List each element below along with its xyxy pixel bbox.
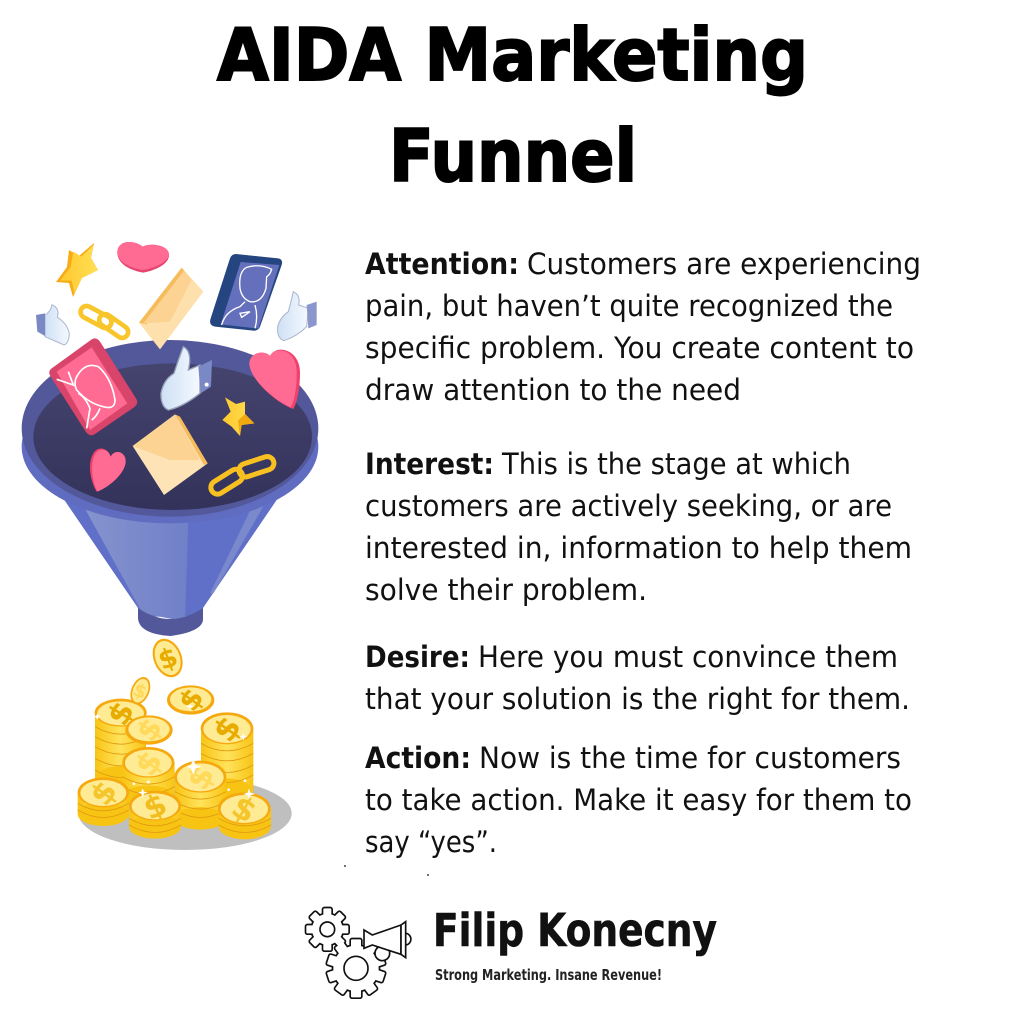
coin stack front middle (129, 787, 181, 839)
text block: interest: interested in, information to help them (365, 531, 912, 565)
funnel illustration (22, 242, 318, 636)
text block: desire: that your solution is the right for them. (365, 682, 910, 716)
text block: action: Action: (365, 741, 471, 775)
text block: attention (365, 247, 921, 407)
text block: action: to take action. Make it easy for them to (365, 783, 912, 817)
text block: attention: pain, but haven’t quite recognized the (365, 289, 893, 323)
icon: thumb center (161, 347, 212, 410)
logo tagline: Strong Marketing. Insane Revenue! (435, 966, 662, 984)
coin stack front right (218, 789, 271, 839)
icon: phone with man (210, 254, 282, 331)
coin stack center: $ (128, 744, 170, 783)
coin stack back right: $ (205, 709, 249, 749)
title: Funnel (389, 114, 637, 198)
falling coin small: $ (130, 680, 150, 704)
funnel cone (39, 463, 302, 622)
coin stack back left: $ (101, 696, 142, 732)
funnel rim (22, 340, 318, 517)
funnel nozzle (138, 608, 203, 636)
coin stack right center (174, 759, 226, 830)
text block: interest: customers are actively seeking, or are (365, 489, 892, 523)
icon: star lower (222, 397, 254, 436)
coin stack center (122, 744, 175, 809)
coin stack front right: $ (225, 789, 262, 831)
falling coin flat: $ (171, 682, 211, 717)
icon: heart top (117, 242, 169, 273)
logo name: Filip Konecny (433, 904, 717, 957)
text block: interest: This is the stage at which (501, 447, 851, 481)
logo icon: gears and megaphone (306, 908, 411, 997)
coin stack right center: $ (180, 759, 222, 796)
falling coin small (127, 674, 154, 707)
falling coin large (147, 634, 188, 682)
icon: heart right (249, 350, 300, 409)
text block: attention: Attention: (365, 247, 519, 281)
text block: desire: Here you must convince them (478, 640, 898, 674)
text block: desire (365, 640, 910, 716)
coin stack front middle: $ (138, 787, 173, 828)
text block: action: Now is the time for customers (479, 741, 901, 775)
title: AIDA Marketing (217, 13, 808, 97)
text block: action: say “yes”. (365, 825, 497, 859)
icon: thumb right (278, 292, 317, 341)
text block: interest: Interest: (365, 447, 494, 481)
text block: attention: draw attention to the need (365, 373, 741, 407)
coin sparkles (94, 703, 255, 799)
coin stack back left (95, 696, 147, 793)
flat coin on back stack: $ (129, 711, 169, 748)
text block: action (365, 741, 912, 859)
text block: attention: Customers are experiencing (527, 247, 921, 281)
text block: desire: Desire: (365, 640, 470, 674)
coins illustration (78, 634, 292, 850)
icon: envelope lower (133, 414, 208, 495)
icon: pink phone (49, 338, 137, 435)
falling coin large: $ (154, 641, 182, 677)
icon: envelope top (139, 268, 203, 349)
icon: chain top (78, 304, 130, 340)
logo (306, 904, 717, 997)
funnel rim lip (22, 370, 318, 523)
icon: heart lower (90, 449, 126, 492)
icon: star top left (56, 243, 98, 297)
text block: interest (365, 447, 912, 607)
icon: chain lower (208, 455, 276, 497)
funnel interior (33, 363, 312, 510)
coin stack back right (201, 709, 253, 805)
coin stack front left (78, 775, 129, 826)
coin stack front left: $ (84, 775, 125, 812)
coin shadow (78, 777, 292, 850)
text block: attention: specific problem. You create content to (365, 331, 914, 365)
icon: thumb left (36, 305, 69, 345)
title (217, 13, 808, 198)
text block: interest: solve their problem. (365, 573, 647, 607)
